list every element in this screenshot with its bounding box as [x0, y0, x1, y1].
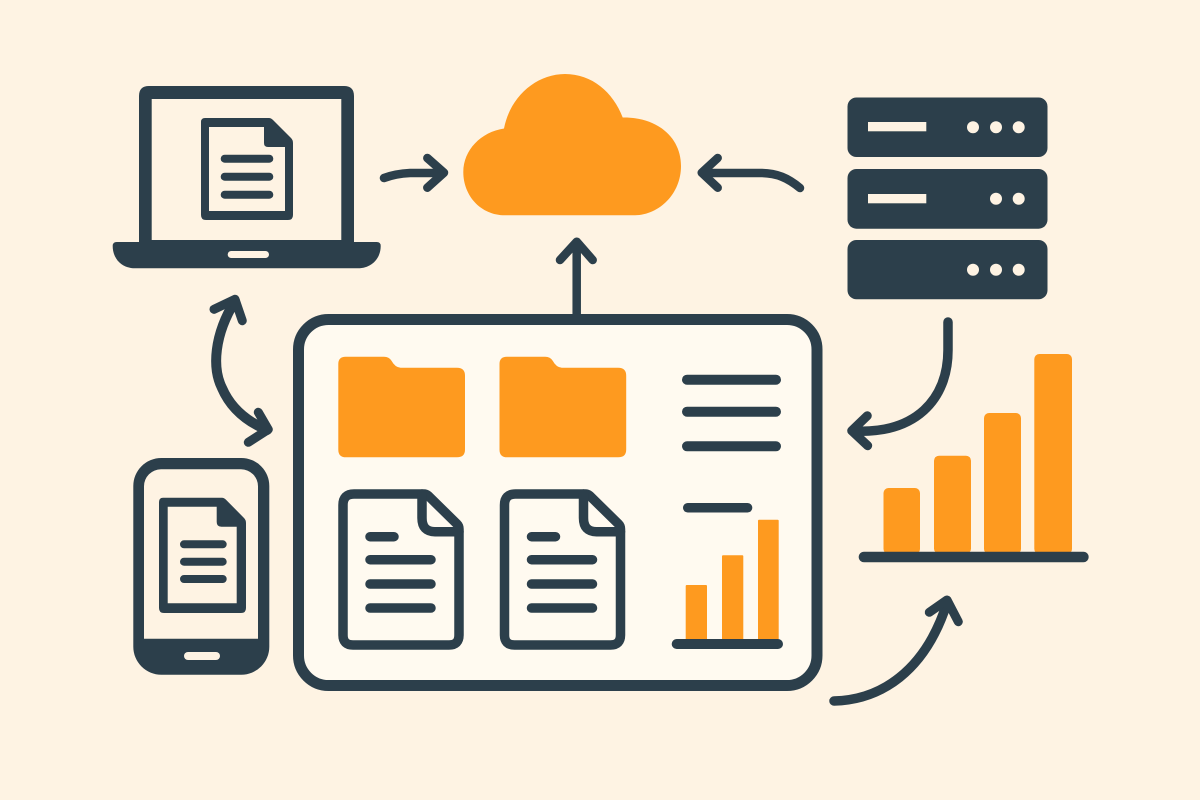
icon: phone with document: [133, 458, 269, 675]
arrow: laptop to cloud: [384, 158, 444, 188]
icon: cloud: [463, 74, 681, 215]
arrow: laptop and phone two-way: [214, 299, 268, 442]
icon: folder left: [338, 357, 465, 457]
chart: large bar chart: [859, 354, 1089, 562]
icon: document right: [504, 494, 620, 645]
arrow: server to cloud: [702, 158, 800, 188]
arrow: server to dashboard: [852, 322, 948, 446]
chart: small bars: [672, 503, 783, 649]
icon: document left: [343, 494, 459, 645]
arrow: dashboard to bar chart: [834, 600, 958, 701]
icon: folder right: [500, 357, 626, 457]
arrow: dashboard to cloud: [560, 242, 593, 316]
text lines: [687, 380, 776, 446]
icon: server rack: [848, 98, 1048, 299]
panel: file dashboard: [298, 320, 817, 686]
icon: laptop with document: [113, 86, 381, 268]
